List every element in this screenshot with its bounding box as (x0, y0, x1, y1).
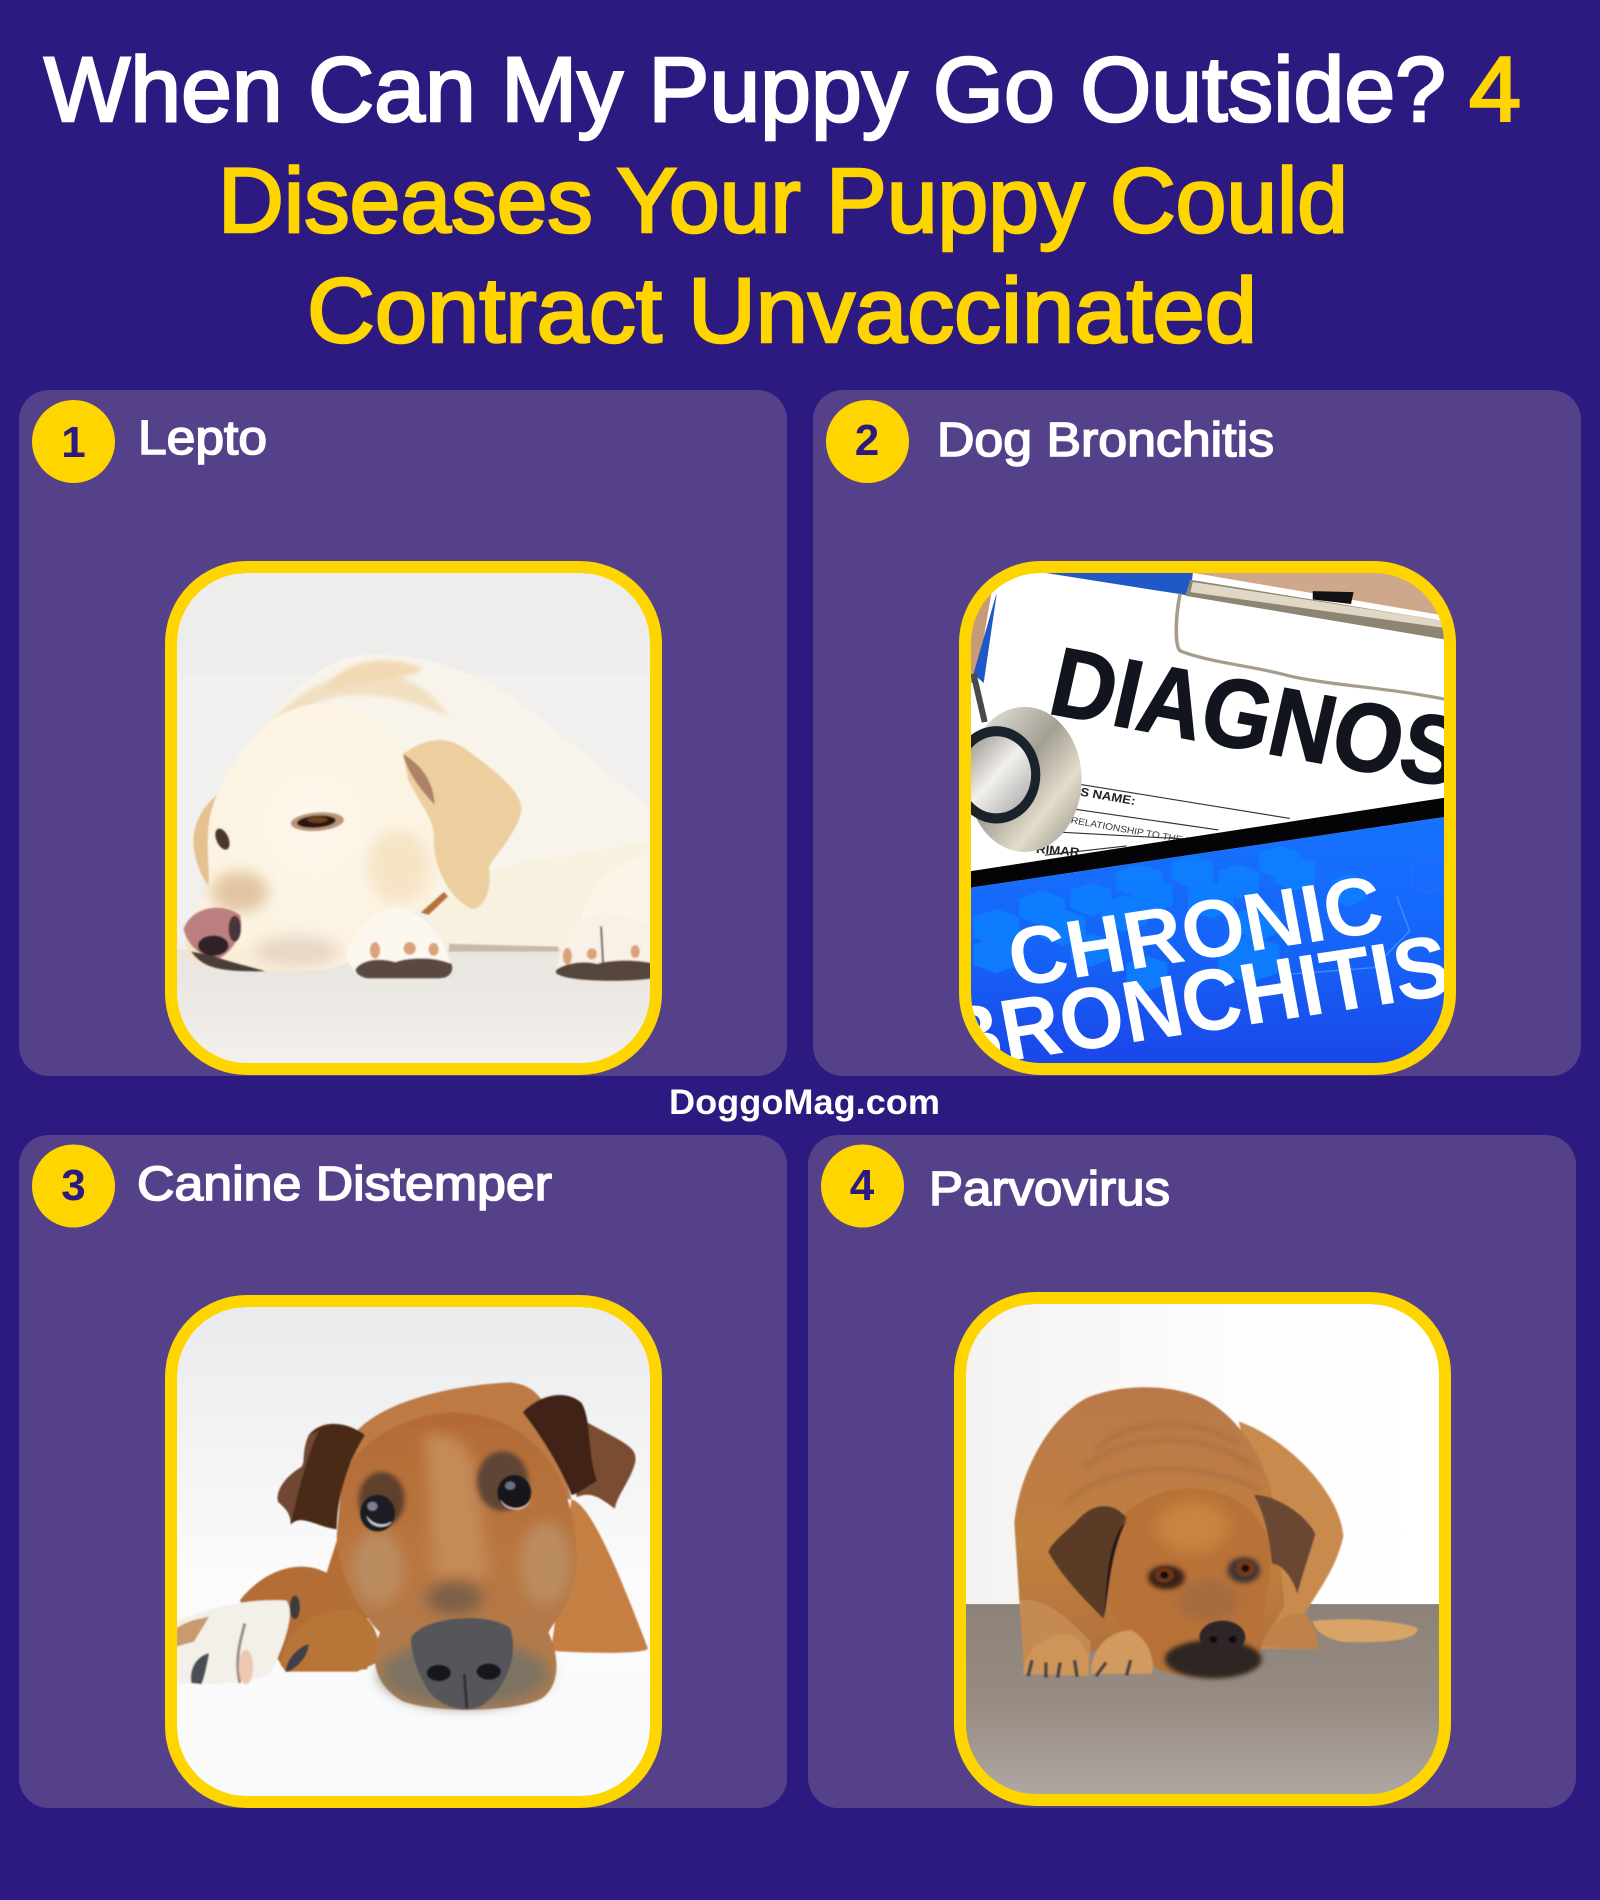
photo: large brown dog on floor (966, 1304, 1439, 1794)
photo: chronic bronchitis diagnosis clipboard (971, 573, 1444, 1063)
title: Diseases Your Puppy Could (218, 150, 1348, 252)
number badge 2: 2 (855, 416, 879, 465)
title: When Can My Puppy Go Outside? (44, 39, 1446, 141)
photo: chronic bronchitis diagnosis clipboard: S NAME: (1079, 785, 1137, 808)
number badge 4: 4 (850, 1161, 875, 1210)
number badge 4 (821, 1144, 904, 1228)
number badge 3: 3 (61, 1161, 86, 1210)
number badge 1 (32, 400, 115, 483)
photo: chronic bronchitis diagnosis clipboard: BRONCHITIS (934, 916, 1457, 1089)
panel: Lepto (19, 390, 787, 1082)
title: Contract Unvaccinated (307, 260, 1257, 362)
title (44, 39, 1521, 362)
photo: brown dog looking up (177, 1307, 650, 1796)
heading: Parvovirus: Parvovirus (929, 1163, 1170, 1216)
panel: Parvovirus (808, 1135, 1576, 1808)
heading: Dog Bronchitis: Dog Bronchitis (937, 414, 1274, 467)
photo frame 4 (960, 1298, 1445, 1800)
photo: chronic bronchitis diagnosis clipboard: CHRONIC (1001, 859, 1390, 1005)
panel: Dog Bronchitis (813, 390, 1581, 1089)
photo: chronic bronchitis diagnosis clipboard: RELATIONSHIP TO THE INSU (1070, 816, 1210, 850)
photo frame 1 (171, 567, 656, 1069)
number badge 1: 1 (61, 418, 86, 467)
number badge 2 (826, 400, 909, 483)
heading: Lepto: Lepto (138, 412, 267, 465)
number badge 3 (32, 1144, 115, 1228)
heading: Canine Distemper: Canine Distemper (137, 1158, 552, 1211)
photo: chronic bronchitis diagnosis clipboard: DIAGNOS (1041, 627, 1473, 808)
website credit: DoggoMag.com (669, 1083, 940, 1122)
photo frame 2 (965, 567, 1450, 1069)
photo: chronic bronchitis diagnosis clipboard: RIMAR (1035, 843, 1080, 859)
panel: Canine Distemper (19, 1135, 787, 1812)
photo: sleepy yellow labrador (177, 573, 650, 1063)
title: 4 (1469, 39, 1521, 141)
photo frame 3 (171, 1301, 656, 1802)
